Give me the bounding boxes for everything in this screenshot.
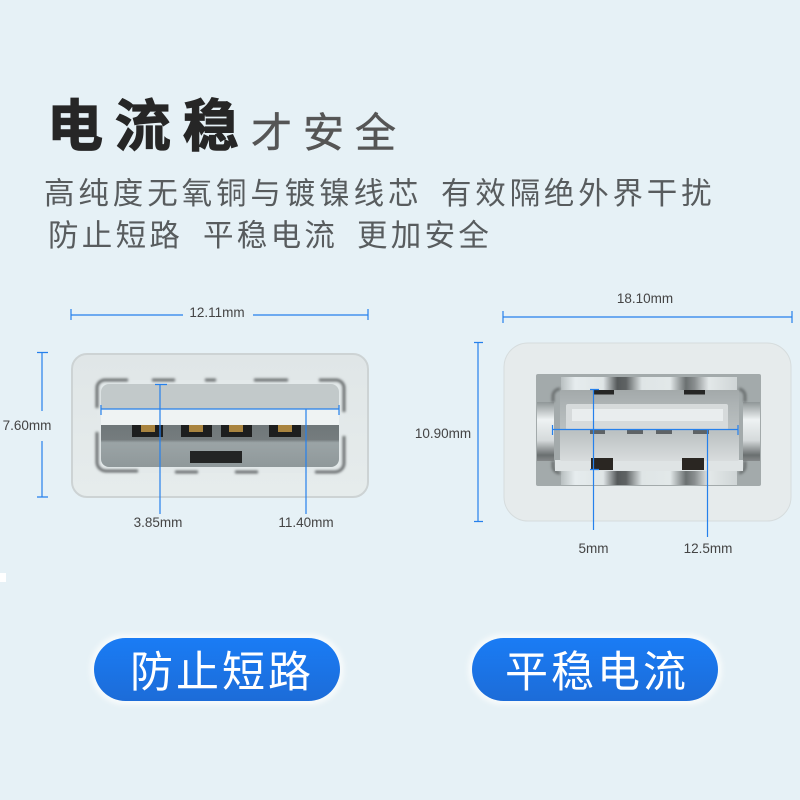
centre tongue block xyxy=(560,390,739,461)
dimension labels xyxy=(415,291,732,556)
lower light lip xyxy=(555,460,743,471)
title xyxy=(47,95,407,158)
dimension lines xyxy=(37,309,368,514)
tongue slot xyxy=(566,404,728,430)
dimension labels: 5mm xyxy=(578,541,608,556)
dimension labels: 11.40mm xyxy=(278,515,334,530)
button: 防止短路: 防止短路 xyxy=(130,649,314,697)
description text: 防止短路 xyxy=(48,219,183,253)
left metal spring xyxy=(537,402,554,461)
panel: USB male connector diagram xyxy=(3,305,368,530)
dimension labels: 7.60mm xyxy=(3,418,51,433)
dimension labels: 18.10mm xyxy=(617,291,673,306)
description text: 平稳电流 xyxy=(203,219,338,253)
dimension lines xyxy=(474,311,792,537)
socket recess xyxy=(536,374,761,486)
description text: 高纯度无氧铜与镀镍线芯 xyxy=(44,177,422,211)
dimension labels xyxy=(3,305,334,530)
title: 才安全 xyxy=(251,110,407,156)
connector body xyxy=(72,354,368,497)
title: 电流稳 xyxy=(47,95,250,158)
dimension labels: 12.11mm xyxy=(189,305,245,320)
description text xyxy=(44,177,715,253)
description text: 更加安全 xyxy=(357,219,492,253)
white gap xyxy=(101,409,339,425)
right metal spring xyxy=(743,402,760,461)
connector body xyxy=(504,343,791,521)
description text: 有效隔绝外界干扰 xyxy=(441,177,715,211)
top clips xyxy=(594,390,705,394)
lower tongue xyxy=(101,425,339,467)
dimension labels: 10.90mm xyxy=(415,426,471,441)
top metal shell xyxy=(561,377,737,391)
lower slot xyxy=(190,451,242,463)
dimension labels: 3.85mm xyxy=(134,515,182,530)
pins xyxy=(590,429,709,434)
socket opening xyxy=(97,380,344,473)
bottom metal shell xyxy=(561,470,737,485)
panel: USB female connector diagram xyxy=(415,291,792,556)
white corner mark xyxy=(0,573,6,582)
bottom clips xyxy=(591,458,704,470)
button: 平稳电流 xyxy=(468,634,722,705)
upper tongue xyxy=(101,384,339,409)
contacts xyxy=(132,425,301,437)
tongue slot highlight xyxy=(572,409,723,421)
button: 防止短路 xyxy=(90,634,344,705)
button: 平稳电流: 平稳电流 xyxy=(505,649,689,697)
dimension labels: 12.5mm xyxy=(684,541,732,556)
shell highlights xyxy=(97,380,344,472)
corner curves xyxy=(553,389,745,473)
